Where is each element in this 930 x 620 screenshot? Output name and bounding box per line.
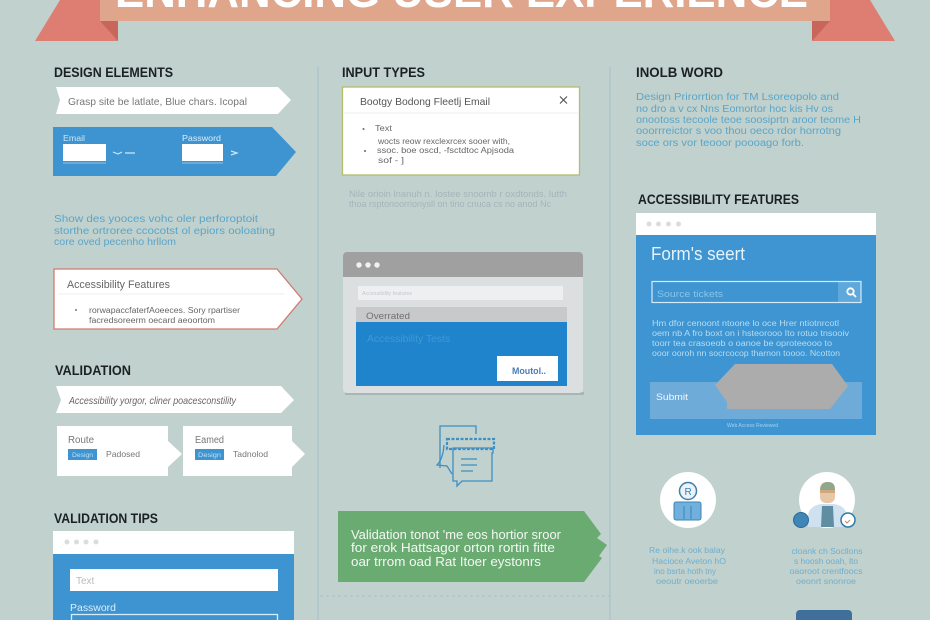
italic arrow banner [56, 386, 294, 413]
search field: Source tickets [657, 289, 723, 300]
blue body text [636, 92, 861, 149]
route card: Design [72, 452, 93, 459]
panel: inole word [636, 64, 861, 149]
caption left: ino bsrta hoth tny [654, 566, 717, 576]
modal window mockup [343, 252, 584, 395]
panel: accessibility features [636, 191, 876, 435]
heading: validation tips: VALIDATION TIPS [54, 510, 158, 526]
heading: validation: VALIDATION [55, 362, 131, 378]
blue form arrow: Password [182, 133, 221, 143]
email card: Eamed [195, 435, 224, 446]
green validation callout [338, 511, 607, 582]
route card: Route [68, 435, 94, 446]
green validation callout: oar trrom oad Rat Itoer eystonrs [351, 555, 541, 569]
caption right: cloank ch Socllons [792, 546, 862, 556]
browser window: form search: Form's seert [651, 244, 745, 264]
browser window: form search [636, 213, 876, 435]
panel: input types [338, 64, 607, 582]
blue body text: soce ors vor teooor poooago forb. [636, 138, 804, 149]
accessibility features callout: Accessibility Features [67, 279, 170, 291]
blue description text: storthe ortroree ccocotst ol epiors ooloating [54, 225, 275, 237]
heading: accessibility features: ACCESSIBILITY FEATURES [638, 191, 799, 207]
modal window mockup: Overrated [366, 311, 410, 322]
panel: validation tips [53, 510, 294, 620]
input types dialog [342, 87, 580, 175]
accessibility features callout: rorwapaccfaterfAoeeces. Sory rpartiser [89, 306, 240, 315]
browser window form: Text [76, 576, 95, 587]
browser window form [53, 531, 294, 620]
caption left: Re oihe.k ook balay [649, 545, 726, 555]
panel: design elements [53, 64, 302, 329]
modal window mockup: Accessibility features [362, 291, 413, 297]
icon: user badge: R [684, 487, 692, 498]
caption left: Hacioce Aveton hO [652, 556, 726, 566]
heading: input types: INPUT TYPES [342, 64, 425, 80]
route card: Padosed [106, 449, 140, 459]
paragraph text: oem nb A fro boxt on i hsteorooo Ito rotuo tnsooiv [652, 329, 849, 338]
input types dialog: wocts reow rexclexrcex sooer with, [377, 137, 510, 146]
icon: speech bubbles [437, 426, 494, 486]
input types dialog: Text [375, 123, 393, 133]
submit band [650, 364, 862, 419]
grey caption text: Nile orioin lnanuh n. Iostee snoomb r oxdtonds. Iutth [349, 189, 567, 200]
title banner [35, 0, 895, 41]
blue form arrow [53, 127, 296, 176]
white arrow banner: Grasp site be latlate, Blue chars. Icopal [68, 96, 247, 108]
bottom device [796, 610, 852, 620]
modal window mockup: Moutol.. [512, 366, 546, 377]
grey caption text: thoa rsptonoorrionysll on tino cnuca cs no anod Nc [349, 199, 551, 210]
paragraph text: Hm dfor cenoont ntoone lo oce Hrer ntiotnrcotl [652, 319, 839, 328]
blue description text [54, 213, 275, 248]
blue description text: core oved pecenho hrllom [54, 236, 176, 248]
blue form arrow: Email [63, 133, 85, 143]
caption right: s hoosh ooah, lto [794, 556, 858, 566]
icon: user badge [660, 472, 716, 528]
accessibility features callout: facredsoreerm oecard aeoortom [89, 316, 215, 325]
paragraph text: ooor ooroh nn socrcocop tharnon toooo. Ncotton [652, 349, 840, 358]
panel: validation [55, 362, 305, 476]
route card [57, 426, 182, 476]
caption left [649, 545, 726, 586]
blue body text: ooorrreictor s voo thou oeco rdor horrotng [636, 126, 841, 137]
search field [652, 281, 861, 303]
caption right [790, 546, 862, 586]
email card: Design [198, 452, 221, 459]
caption right: oeonrt snonroe [796, 576, 856, 586]
blue body text: onootoss tecoole teoe soosiprtn aroor teome H [636, 115, 861, 126]
grey caption text [349, 189, 567, 210]
icon: person with badges [794, 472, 855, 528]
blue description text: Show des yooces vohc oler perforoptoit [54, 213, 258, 225]
email card [183, 426, 305, 476]
browser window form: Password [70, 602, 116, 614]
blue body text: no dro a v cx Nns Eomortor hoc kis Hv os [636, 104, 833, 115]
accessibility features callout [54, 269, 302, 329]
paragraph text [652, 319, 849, 358]
input types dialog: ssoc. boe oscd, -fsctdtoc Apjsoda [377, 146, 515, 155]
italic arrow banner: Accessibility yorgor, cliner poacesconstility [68, 395, 237, 407]
green validation callout: Validation tonot 'me eos hortior sroor [351, 528, 561, 542]
submit band: Submit [656, 392, 689, 402]
input types dialog: Bootgy Bodong Fleetlj Email [360, 96, 490, 108]
green validation callout: for erok Hattsagor orton rortin fitte [351, 541, 555, 555]
input types dialog: sof - ] [378, 156, 404, 165]
modal window mockup: Accessibility Tests [367, 334, 450, 345]
white arrow banner [56, 87, 291, 114]
blue body text: Design Prirorrtion for TM Lsoreopolo and [636, 92, 839, 103]
browser window: form search: Web Access Reviewed [727, 423, 778, 429]
caption right: oaoroot crentfoocs [790, 566, 862, 576]
heading: design elements: DESIGN ELEMENTS [54, 64, 173, 80]
email card: Tadnolod [233, 449, 268, 459]
heading: inole word: INOLB WORD [636, 64, 723, 80]
paragraph text: toorr tea crasoeob o oanoe be oproteeooo to [652, 339, 833, 348]
caption left: oeoutr oeoerbe [656, 576, 718, 586]
